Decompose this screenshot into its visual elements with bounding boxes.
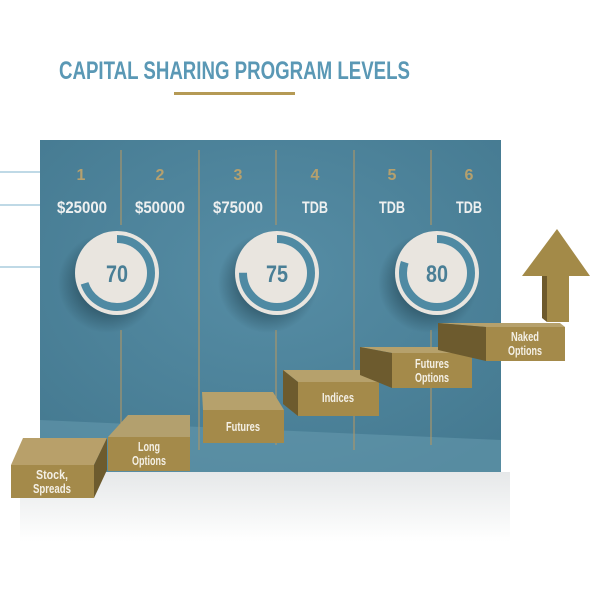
box: indices: Indices [322,390,354,405]
donut 75: 75 [266,261,288,288]
box: futures options: Futures [415,356,449,371]
level numbers: 6 [465,167,474,184]
title: CAPITAL SHARING PROGRAM LEVELS [59,57,410,85]
level numbers: 2 [156,167,165,184]
box: futures [202,392,284,443]
level numbers: 4 [311,167,320,184]
amounts: $50000 [135,198,185,217]
arrow up [522,229,590,322]
title underline [174,92,295,95]
box: stock spreads: Stock, [36,467,68,482]
amounts: $75000 [213,198,263,217]
box: futures: Futures [226,419,260,434]
donut 70: 70 [106,261,128,288]
amounts [57,198,482,217]
amounts: TDB [302,198,328,217]
donut 80 [378,231,479,333]
box: long options: Long [138,439,160,454]
box: stock spreads: Spreads [33,481,71,496]
floor shadow [20,472,510,542]
step boxes [11,323,565,498]
level numbers [77,167,474,184]
amounts: TDB [379,198,405,217]
amounts: $25000 [57,198,107,217]
pointer lines [0,170,50,269]
donut 70 [58,231,159,333]
amounts: TDB [456,198,482,217]
donut 80: 80 [426,261,448,288]
box: futures options [360,347,472,388]
donut 75 [218,231,319,333]
level numbers: 3 [234,167,243,184]
box: indices [283,370,379,416]
box: stock spreads [11,438,107,498]
box: naked options: Options [508,343,542,358]
level numbers: 5 [388,167,397,184]
box: naked options: Naked [511,329,539,344]
box: futures options: Options [415,370,449,385]
box: long options: Options [132,453,166,468]
panel [40,140,501,472]
box: naked options [438,323,565,361]
level numbers: 1 [77,167,86,184]
box: long options [108,415,190,471]
